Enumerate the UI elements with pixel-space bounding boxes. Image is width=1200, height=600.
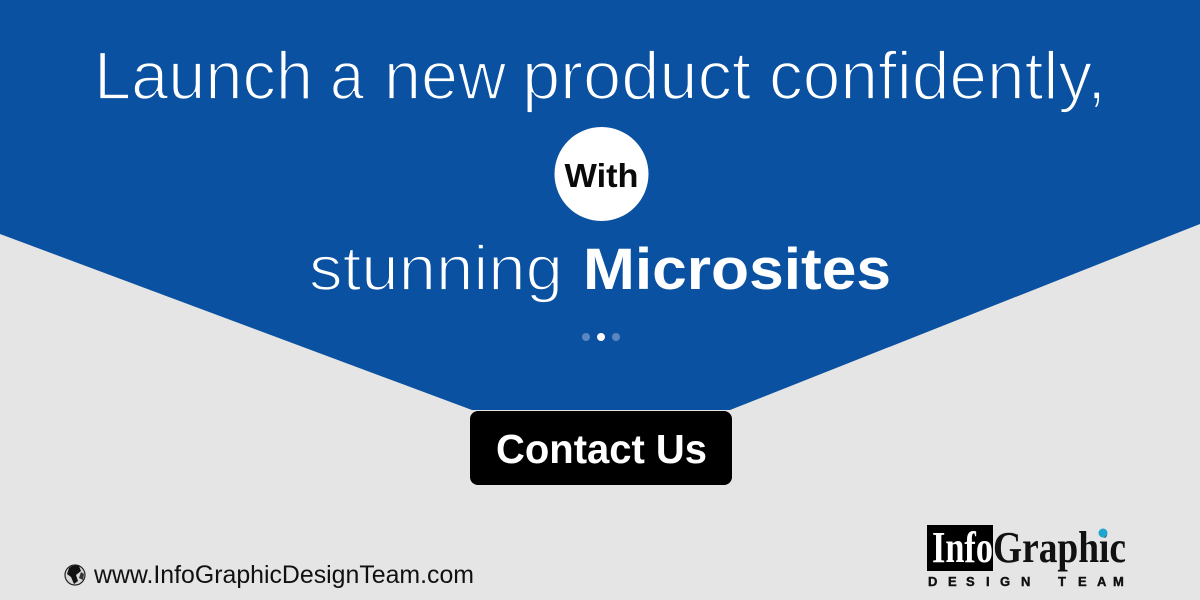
pagination dots [582,333,620,341]
icon: globe [65,565,85,585]
button: Contact Us: Contact Us [496,426,707,472]
logo: InfoGraphic Design Team: Info [932,523,993,572]
panel: blue banner [0,0,1200,410]
heading: launch line: a [330,38,364,114]
heading: stunning Microsites: Microsites [583,237,891,302]
heading: launch line: Launch [94,38,313,114]
button: Contact Us [470,411,732,485]
website url: www.InfoGraphicDesignTeam.com [93,561,474,589]
logo: InfoGraphic Design Team [927,523,1126,589]
badge: With [554,127,648,221]
logo: InfoGraphic Design Team: Graphic [993,523,1126,572]
heading: stunning Microsites: stunning [309,234,563,304]
heading: stunning Microsites [309,234,891,304]
logo: InfoGraphic Design Team: DESIGN [928,574,1030,589]
heading: launch line: confidently, [769,38,1106,114]
heading: launch line [94,38,1106,114]
badge: With: With [564,157,638,194]
heading: launch line: product [522,38,751,114]
logo: InfoGraphic Design Team: TEAM [1058,574,1124,589]
heading: launch line: new [384,38,507,114]
